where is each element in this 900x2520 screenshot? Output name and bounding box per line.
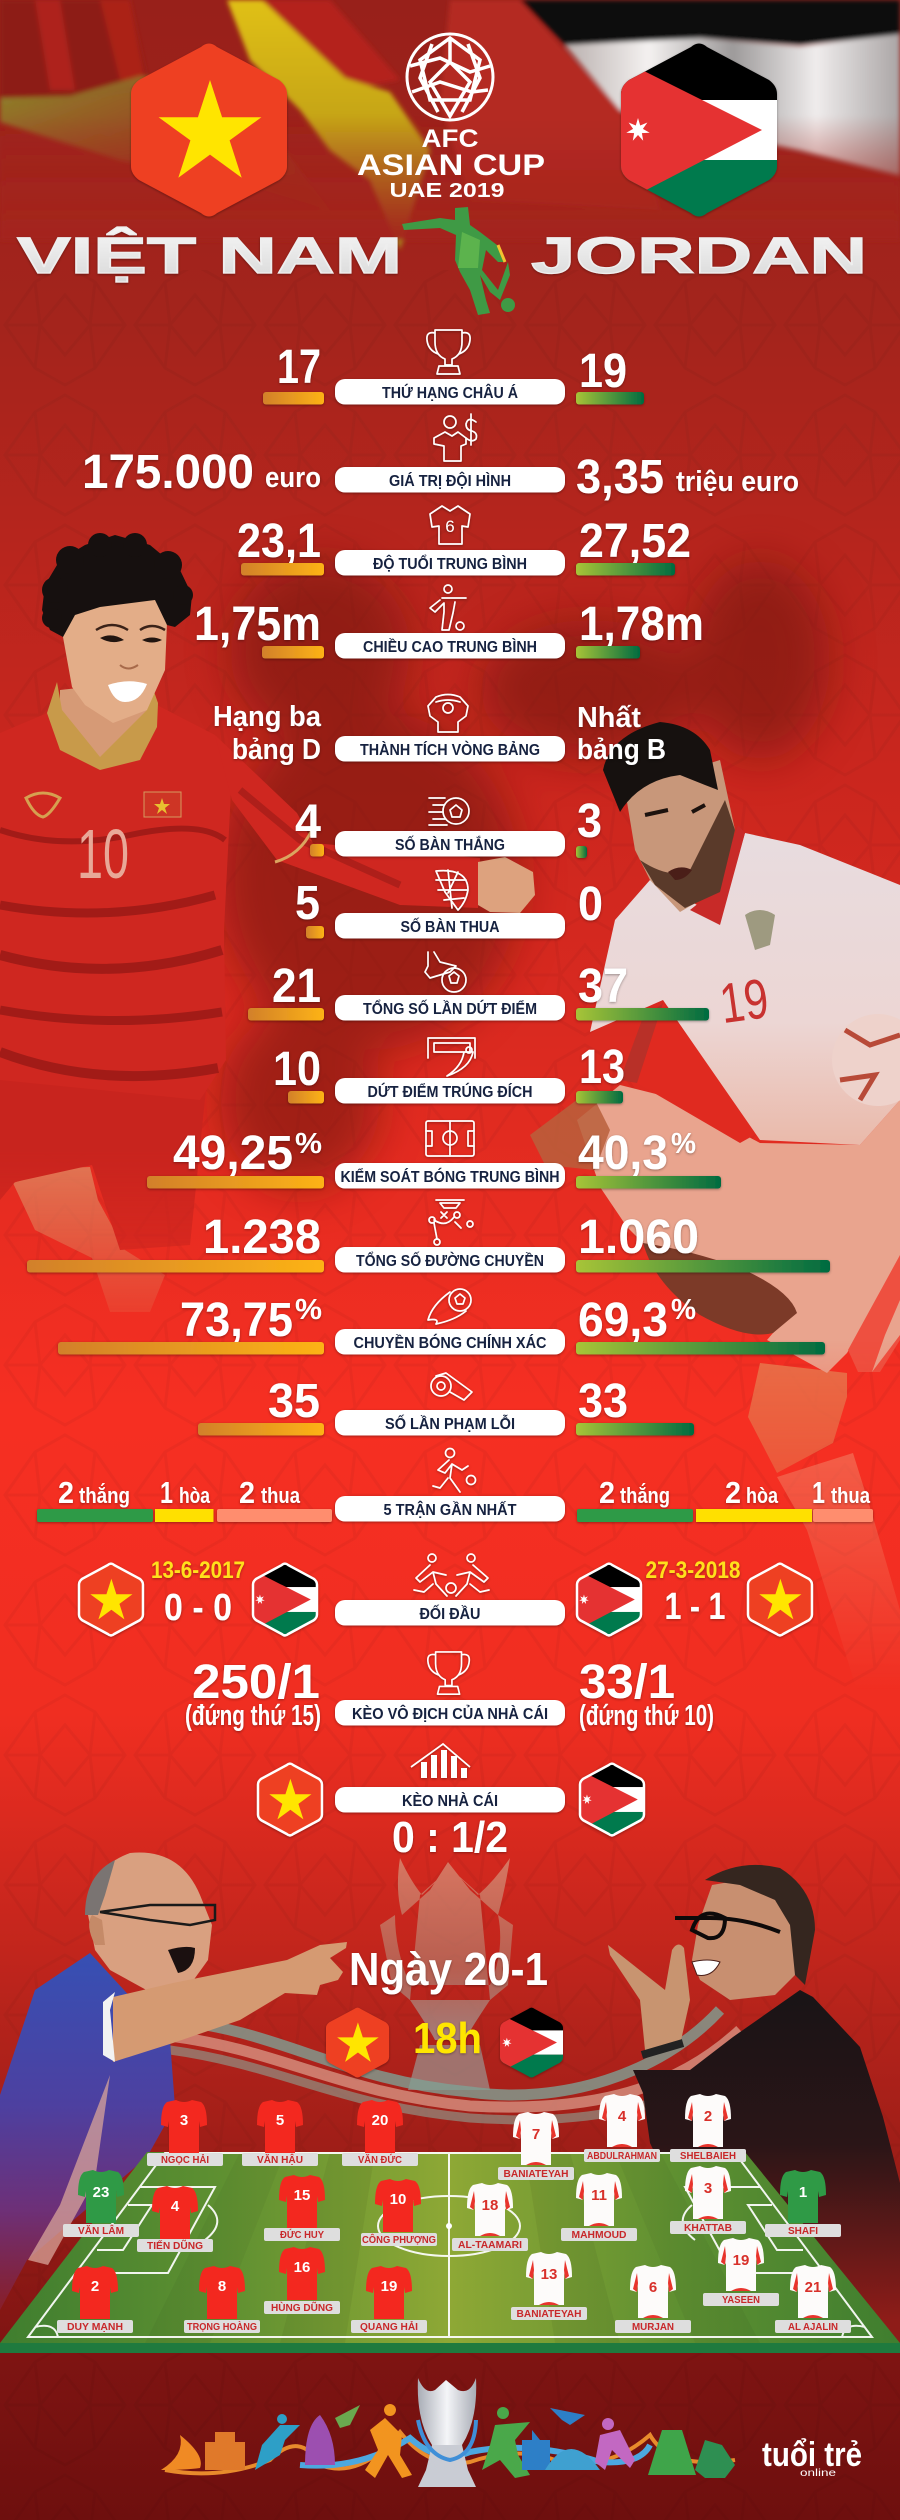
icon: tactic board [426,1121,474,1156]
player 19 [351,2266,427,2333]
player 10: 10 [390,2191,406,2208]
hair [42,533,193,637]
icon: fort [205,2432,245,2470]
shirt number: 19 [716,966,772,1035]
arm [113,1942,347,2062]
row: average age: 27,52 [579,515,691,568]
row: FIFA rank: 19 [579,345,627,398]
flag: Vietnam hexagon [131,44,287,216]
shirt number: 10 [77,815,129,893]
jacket [633,1990,900,2343]
icon: shirt number 6 [430,506,470,544]
row: total shots [248,952,709,1020]
ball [832,1014,900,1106]
facial features [100,635,162,642]
row: total passes: TỔNG SỐ ĐƯỜNG CHUYỀN [356,1252,544,1270]
icon: blue runner [255,2425,300,2470]
icon: runner [433,1448,476,1492]
icon: passing diagram [429,1200,473,1245]
player 13: 13 [541,2266,557,2283]
icon: flame bird [161,2435,201,2470]
player 19: YASEEN [722,2294,760,2306]
player 2: 2 [91,2278,99,2295]
player 4: 4 [171,2198,180,2215]
ribbons [170,2010,760,2120]
boot [643,1243,797,1335]
row: goals for: SỐ BÀN THẮNG [395,836,505,854]
player 19: QUANG HẢI [360,2320,418,2333]
flag: Jordan [580,1761,644,1838]
flag: Vietnam [258,1764,322,1835]
player 20 [342,2100,418,2166]
kick-off time: 18h [413,2014,482,2063]
player 4: 4 [618,2108,627,2125]
shirt [0,1953,175,2310]
player 21: AL AJALIN [788,2321,838,2333]
row: squad value [82,414,799,504]
lineup: Jordan [452,2094,851,2333]
player 7 [498,2112,574,2180]
player 16: HÙNG DŨNG [271,2301,333,2314]
row: FIFA rank: THỨ HẠNG CHÂU Á [382,384,518,402]
row: betting odds: 0 : 1/2 [392,1813,508,1862]
row: group stage result: THÀNH TÍCH VÒNG BẢNG [360,741,540,759]
icon: sail tower [305,2415,335,2465]
row: head to head: 1 - 1 [664,1586,726,1628]
AFC Asian Cup logo [357,34,545,202]
row: goals for [295,795,602,858]
shorts [577,1085,900,1373]
row: average age: 23,1 [237,515,321,568]
hair [603,722,718,812]
form: Jordan: hòa [746,1483,779,1508]
shorts [0,1080,206,1250]
player 1 [765,2170,841,2237]
player 1: SHAFI [788,2225,818,2237]
player 3: 3 [704,2180,712,2197]
player 23: VĂN LÂM [78,2224,124,2237]
row: goals against: 5 [295,877,320,930]
row: average age [237,506,691,576]
row: pass accuracy [58,1289,825,1354]
row: total shots: TỔNG SỐ LẦN DỨT ĐIỂM [363,1000,537,1018]
collar [690,825,745,925]
player 16: 16 [294,2259,310,2276]
lineup: Vietnam [57,2100,437,2333]
row: head to head: ĐỐI ĐẦU [420,1605,480,1623]
icon: kicking figure [430,585,466,630]
row: average height: 1,78m [579,598,704,651]
row: squad value: triệu euro [676,466,799,498]
icon: orange player [365,2418,412,2478]
row: FIFA rank [263,330,644,404]
row: title odds: KÈO VÔ ĐỊCH CỦA NHÀ CÁI [352,1705,548,1723]
row: last 5 matches: 5 TRẬN GẦN NHẤT [384,1501,517,1519]
pitch [0,2152,900,2353]
stat rows [27,330,873,1862]
row: group stage result: Nhất [577,702,641,734]
form: Vietnam: thua [261,1483,301,1508]
title: Việt Nam: VIỆT NAM [17,226,402,284]
glasses [675,1914,780,1938]
row: fouls: 33 [578,1375,628,1428]
player 10: CÔNG PHƯỢNG [362,2233,436,2246]
player 3 [670,2166,746,2234]
icon: ball with speed lines [429,798,469,825]
icon: green player [482,2422,530,2478]
icon: green bird [335,2405,360,2428]
row: title odds: 33/1 [579,1656,675,1709]
row: possession: % [671,1128,696,1160]
player: Jordan 19 [530,722,900,1700]
player 15: 15 [294,2187,310,2204]
row: group stage result: bảng D [232,734,321,766]
player 20: 20 [372,2112,388,2129]
row: goals against: SỐ BÀN THUA [400,918,500,936]
player 6 [615,2265,691,2333]
icon: two players [414,1554,489,1596]
player 8 [184,2266,260,2333]
player 2 [57,2266,133,2333]
row: average age: ĐỘ TUỔI TRUNG BÌNH [373,555,527,573]
green footballer [402,207,515,315]
row: goals for: 4 [295,796,321,849]
icon: group stage [428,694,468,732]
row: average height: 1,75m [194,598,321,651]
row: pass accuracy: % [671,1294,696,1326]
player 11: MAHMOUD [572,2229,627,2241]
footer artwork [161,2378,735,2487]
player 3: 3 [180,2112,188,2129]
row: head to head: 27-3-2018 [646,1557,740,1584]
row: possession [147,1121,721,1188]
row: shots on target: 10 [273,1043,321,1096]
form: Vietnam: 1 [160,1475,173,1510]
player 6: 6 [649,2279,657,2296]
row: average height: CHIỀU CAO TRUNG BÌNH [363,639,537,656]
logo text: AFC [422,125,478,153]
icon: goal [428,1038,475,1076]
Tuoi Tre logo: tuổi trẻ [762,2436,862,2474]
row: possession: KIỂM SOÁT BÓNG TRUNG BÌNH [340,1168,560,1186]
form: Jordan: 1 [812,1475,825,1510]
form: Vietnam: 2 [239,1475,255,1510]
jersey [590,833,900,1145]
date: Ngày 20-1 [349,1943,548,1995]
neck and face [625,760,735,912]
icon: green tower [648,2430,696,2475]
player 8: TRỌNG HOÀNG [187,2320,257,2333]
row: head to head [79,1554,812,1638]
player 18: 18 [482,2197,498,2214]
row: average height [194,585,704,658]
player 2: DUY MẠNH [67,2321,123,2333]
row: fouls: SỐ LẦN PHẠM LỖI [385,1415,515,1433]
mouth [692,1960,720,1975]
player 10 [361,2179,437,2246]
neck [60,680,150,758]
fist [478,857,535,913]
row: total passes: 1.238 [203,1211,321,1264]
player 15 [264,2175,340,2241]
row: possession: % [295,1128,322,1160]
hair [705,1865,815,1985]
row: squad value: GIÁ TRỊ ĐỘI HÌNH [389,472,511,490]
row: squad value: 175.000 [82,446,254,499]
row: total shots: 21 [272,960,321,1013]
mouth [168,1947,195,1973]
player 2: 2 [704,2108,712,2125]
player: Công Phượng [0,533,535,1312]
row: group stage result: bảng B [577,734,666,766]
icon: bar chart with arrow [411,1744,470,1778]
flag: Jordan [500,2005,563,2080]
player 4: ABDULRAHMAN [587,2150,657,2162]
player 13 [511,2252,587,2320]
player 4 [584,2094,660,2162]
player 18 [452,2183,528,2251]
row: squad value: euro [265,462,321,494]
player 2: SHELBAIEH [680,2150,736,2162]
player 15: ĐỨC HUY [280,2228,324,2241]
form: Vietnam: 2 [58,1475,74,1510]
row: goals for: 3 [577,795,602,848]
player 3: KHATTAB [684,2222,732,2234]
head [692,1875,795,2000]
row: total passes [27,1200,830,1272]
logo text: UAE 2019 [390,180,504,202]
row: group stage result [213,694,666,766]
row: pass accuracy: % [295,1294,322,1326]
row: title odds: (đứng thứ 10) [579,1700,714,1732]
player 21: 21 [805,2279,821,2296]
row: head to head: 13-6-2017 [151,1557,245,1584]
hand [608,1944,690,2050]
icon: green horse [695,2440,735,2478]
row: possession: 49,25 [173,1127,293,1180]
icon: trophy [427,330,470,374]
player 21 [775,2265,851,2333]
player 11: 11 [591,2187,607,2204]
row: average age: 6 [445,517,455,536]
player 5 [242,2100,318,2166]
title [17,226,867,284]
form: Vietnam [37,1475,332,1522]
glasses [100,1905,215,1925]
row: group stage result: Hạng ba [213,701,322,733]
match date and time [326,1943,563,2080]
player 16 [264,2247,340,2314]
icon: purple player [595,2430,635,2470]
shirt badge and flag [144,792,181,817]
icon: whistle [431,1373,472,1400]
arm [215,735,480,908]
icon: shirt and money [434,414,476,461]
form: Jordan: 2 [599,1475,615,1510]
row: head to head: 0 - 0 [164,1587,232,1629]
flag: Jordan [577,1561,641,1638]
Tuoi Tre logo: online [800,2468,837,2479]
player 7: BANIATEYAH [504,2168,568,2180]
coach: Vital Borkelmans [608,1865,900,2343]
row: title odds: 250/1 [192,1656,320,1709]
player 3: NGỌC HẢI [161,2153,209,2166]
flag: Vietnam [79,1564,143,1635]
row: squad value: 3,35 [576,451,664,504]
flag: Jordan [253,1561,317,1638]
head [88,1853,212,1992]
icon: net [436,870,468,910]
sock and lower leg [777,1453,900,1700]
row: possession: 40,3 [578,1127,668,1180]
logo text: ASIAN CUP [357,149,545,182]
flag: Vietnam [748,1564,812,1635]
logo text [357,125,545,202]
player 3 [147,2100,223,2166]
trophy ghost [380,1858,513,2090]
icon: boot and ball [425,952,466,992]
draped flags background [0,0,900,250]
row: pass accuracy: 69,3 [578,1294,668,1347]
player 23: 23 [93,2184,109,2201]
faded background players [220,560,830,1190]
row: shots on target: DỨT ĐIỂM TRÚNG ĐÍCH [368,1083,532,1101]
face [62,600,167,723]
player 5: VĂN HẬU [257,2153,303,2166]
player 11 [561,2173,637,2241]
player 23 [63,2170,139,2237]
player 20: VĂN ĐỨC [358,2153,402,2166]
row: last 5 matches [37,1448,873,1522]
logo ball [407,34,493,120]
form: Jordan [577,1475,873,1522]
icon: flying ball [428,1289,471,1324]
player 8: 8 [218,2278,226,2295]
player 6: MURJAN [632,2321,674,2333]
form: Jordan: 2 [725,1475,741,1510]
player 4 [137,2186,213,2252]
row: shots on target [273,1038,625,1104]
row: fouls [198,1373,694,1436]
row: title odds: (đứng thứ 15) [185,1700,321,1732]
row: FIFA rank: 17 [277,341,321,394]
red inner sleeve [655,1052,750,1143]
icon: blue bird [550,2408,585,2425]
player 1: 1 [799,2184,807,2201]
player 19 [703,2238,779,2306]
row: total shots: 37 [578,960,628,1013]
legs [13,1167,165,1312]
player 7: 7 [532,2126,540,2143]
player 19: 19 [733,2252,749,2269]
player 18: AL-TAAMARI [458,2239,522,2251]
row: goals against [295,870,603,938]
player 19: 19 [381,2278,397,2295]
icon: blue buildings [522,2430,550,2470]
row: total passes: 1.060 [578,1211,699,1264]
ribbon [165,2432,735,2473]
flag: Vietnam [326,2008,389,2077]
row: betting odds: KÈO NHÀ CÁI [402,1793,498,1810]
icon: silver trophy [418,2378,476,2487]
row: shots on target: 13 [579,1041,625,1094]
form: Vietnam: thắng [79,1483,130,1508]
row: title odds [185,1652,714,1732]
coach: Park Hang-seo [0,1853,347,2310]
title: Jordan: JORDAN [531,227,867,284]
row: goals against: 0 [578,878,603,931]
player 5: 5 [276,2112,284,2129]
crest [745,910,775,950]
icon: trophy [428,1652,469,1694]
bracelets [642,2043,683,2055]
player 4: TIẾN DŨNG [147,2239,203,2252]
form: Vietnam: hòa [179,1483,211,1508]
player 13: BANIATEYAH [516,2308,582,2320]
row: fouls: 35 [268,1375,320,1428]
row: pass accuracy: 73,75 [180,1294,293,1347]
row: pass accuracy: CHUYỀN BÓNG CHÍNH XÁC [354,1334,546,1352]
hand [530,1090,610,1170]
flag: Jordan hexagon [621,37,777,222]
collar [47,680,158,770]
jersey body [0,705,232,1100]
row: betting odds [258,1744,644,1862]
form: Jordan: thắng [620,1483,670,1508]
player 2 [670,2094,746,2162]
form: Jordan: thua [831,1483,871,1508]
